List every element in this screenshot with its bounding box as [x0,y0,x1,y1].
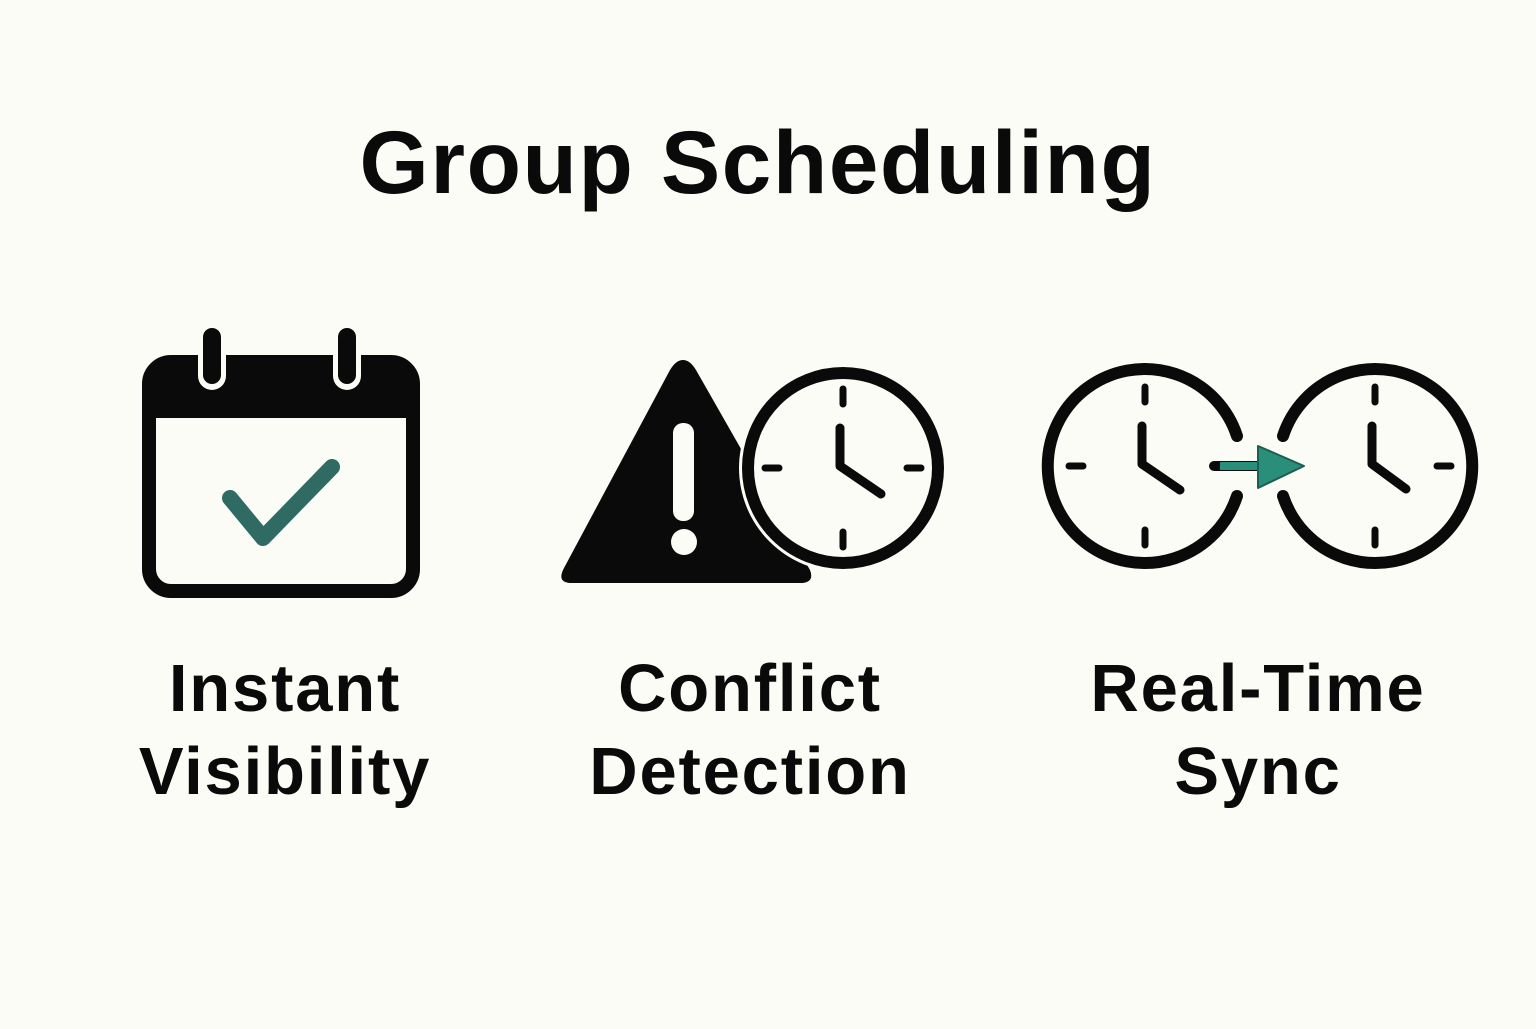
label: Conflict Detection: Detection [589,734,911,809]
label: Instant Visibility: Instant [169,651,401,726]
icon: calendar with check [149,322,413,591]
title: Group Scheduling [360,112,1156,212]
label: Instant Visibility: Visibility [139,734,431,809]
icon: clock to clock sync [1048,369,1472,563]
label: Real-Time Sync: Sync [1174,734,1342,809]
label: Conflict Detection: Conflict [618,651,882,726]
arrow [1214,446,1304,488]
label: Real-Time Sync: Real-Time [1090,651,1426,726]
icon: warning with clock [561,360,947,583]
